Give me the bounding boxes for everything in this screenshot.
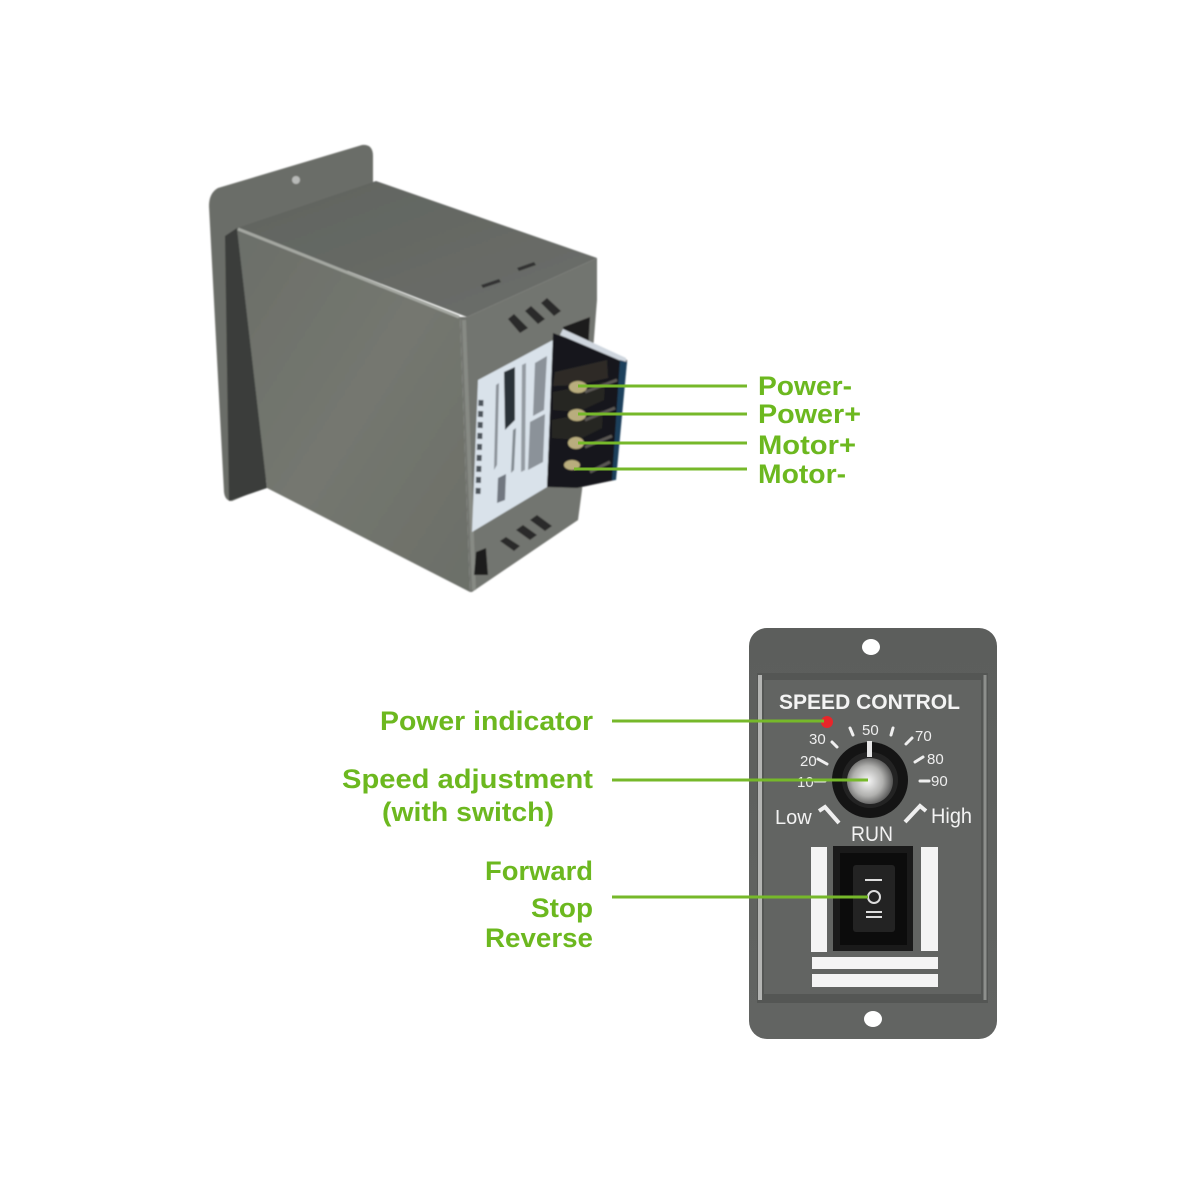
control labels: Power indicator <box>380 706 594 736</box>
speed scale numbers: 30 <box>809 731 826 748</box>
speed scale numbers <box>797 722 948 791</box>
terminal labels: Motor+ <box>758 430 856 460</box>
control labels: Speed adjustment <box>342 764 593 794</box>
speed knob <box>832 741 908 818</box>
terminal block <box>547 333 627 488</box>
panel: speed control faceplate <box>749 628 997 1039</box>
mounting holes <box>862 639 880 655</box>
control labels: (with switch) <box>382 797 554 827</box>
rocker switch <box>833 846 913 951</box>
speed scale numbers: 90 <box>931 773 948 790</box>
top slits <box>481 262 536 288</box>
speed scale numbers: 80 <box>927 751 944 768</box>
control labels <box>342 706 594 953</box>
speed scale numbers: 20 <box>800 753 817 770</box>
speed scale numbers: 10 <box>797 774 814 791</box>
terminal labels: Power+ <box>758 399 861 429</box>
embossed frame <box>757 673 988 1003</box>
end face of box <box>460 258 597 592</box>
leader lines: controls <box>612 721 868 897</box>
indicator LED <box>821 716 833 728</box>
terminal labels: Motor- <box>758 459 846 489</box>
speed scale numbers: 70 <box>915 728 932 745</box>
terminal labels <box>758 371 861 489</box>
device: rear view of controller box <box>209 145 627 592</box>
heading: SPEED CONTROL <box>779 691 960 714</box>
top face of box <box>237 181 597 317</box>
control labels: Reverse <box>485 923 593 953</box>
low label: Low <box>775 807 812 829</box>
large side face of box <box>237 228 470 592</box>
bottom notch <box>474 548 488 575</box>
upper vents <box>500 298 561 551</box>
dark slot <box>563 317 590 352</box>
run label: RUN <box>851 823 893 846</box>
low and high arrows <box>819 807 839 823</box>
scale ticks <box>815 728 929 781</box>
white stripes <box>811 847 938 987</box>
control labels: Forward <box>485 856 593 886</box>
control labels: Stop <box>531 893 593 923</box>
leader lines: terminals <box>574 386 747 469</box>
terminal screws <box>564 381 587 470</box>
flange screw hole <box>292 176 300 184</box>
high label: High <box>931 805 972 828</box>
specification label <box>472 340 553 532</box>
side edge highlight <box>238 229 459 317</box>
speed scale numbers: 50 <box>862 722 879 739</box>
terminal labels: Power- <box>758 371 852 401</box>
mounting flange <box>209 145 373 501</box>
